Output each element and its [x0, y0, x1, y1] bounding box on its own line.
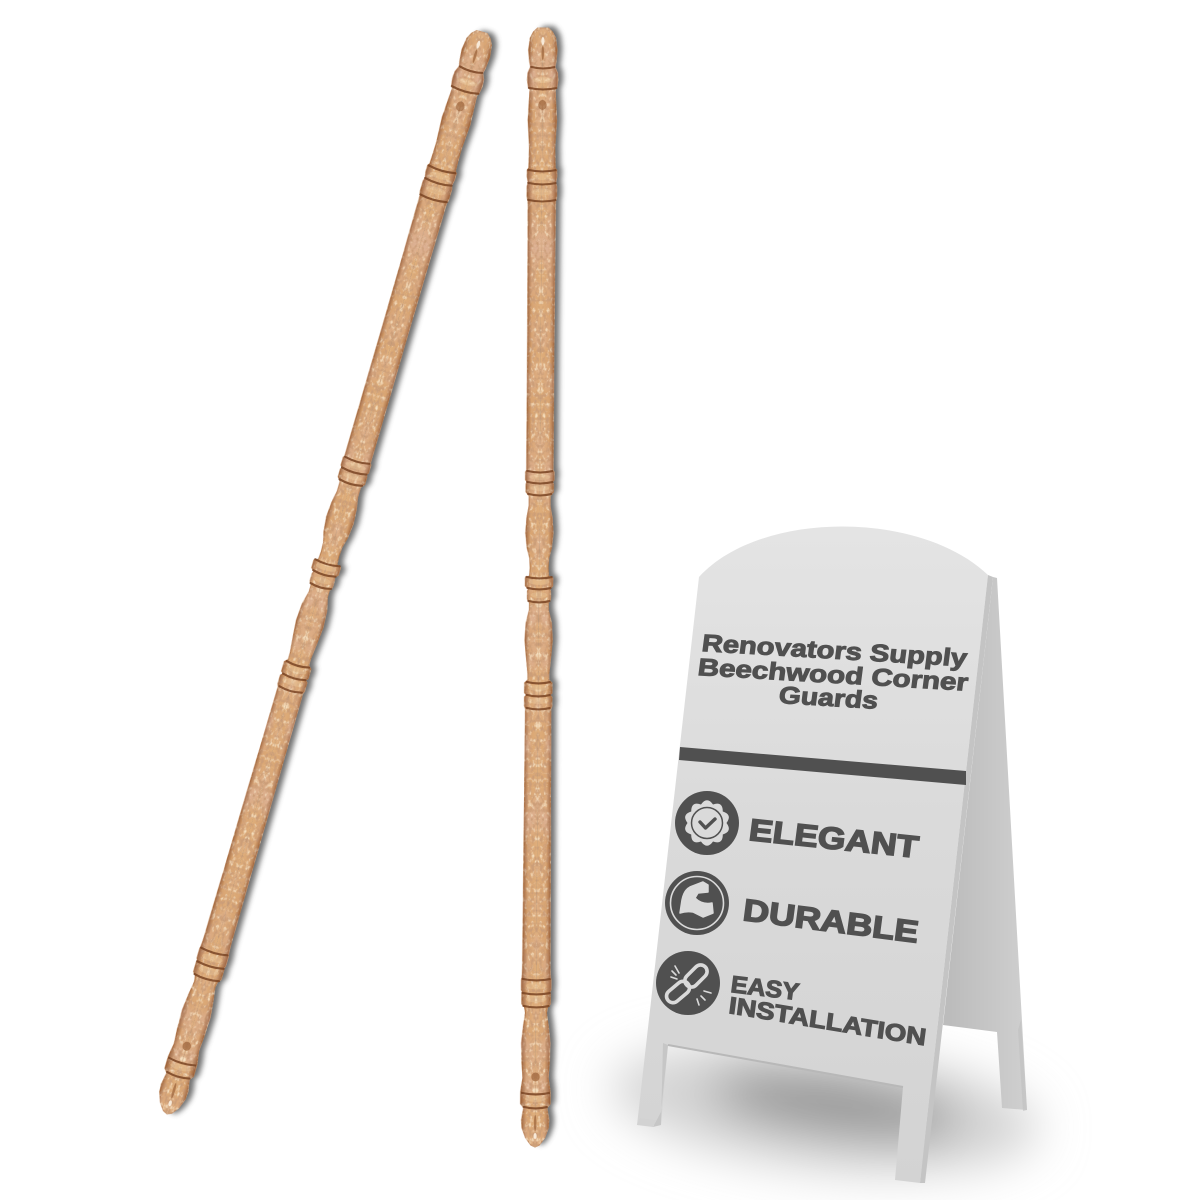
- floor shadow: [605, 1024, 1045, 1192]
- wooden corner guard: right, upright: [520, 26, 564, 1147]
- label: easy installation: EASY: [729, 972, 801, 1006]
- title: [696, 630, 970, 715]
- icon: flexed arm: [665, 871, 729, 935]
- title: Beechwood Corner: [696, 654, 970, 697]
- sign front panel: [637, 526, 988, 1183]
- wooden corner guard: left, leaning: [152, 26, 502, 1120]
- sign right edge thickness: [920, 575, 993, 1183]
- label: elegant: ELEGANT: [747, 812, 921, 865]
- title: Renovators Supply: [700, 630, 969, 672]
- icon: badge with check: [675, 791, 739, 855]
- label: easy installation: INSTALLATION: [727, 992, 928, 1051]
- divider bar: [679, 747, 966, 785]
- sign left leg inner side: [653, 1043, 668, 1127]
- sign lower edge: [668, 1045, 903, 1087]
- title: Guards: [777, 682, 880, 715]
- sign left leg shade: [637, 1118, 656, 1127]
- sign back panel: [943, 577, 1027, 1110]
- icon: chain link: [656, 951, 720, 1015]
- label: durable: DURABLE: [741, 892, 921, 950]
- a-frame sign: [605, 526, 1045, 1192]
- sign back leg edge: [1018, 1020, 1027, 1111]
- label: easy installation: [727, 972, 928, 1051]
